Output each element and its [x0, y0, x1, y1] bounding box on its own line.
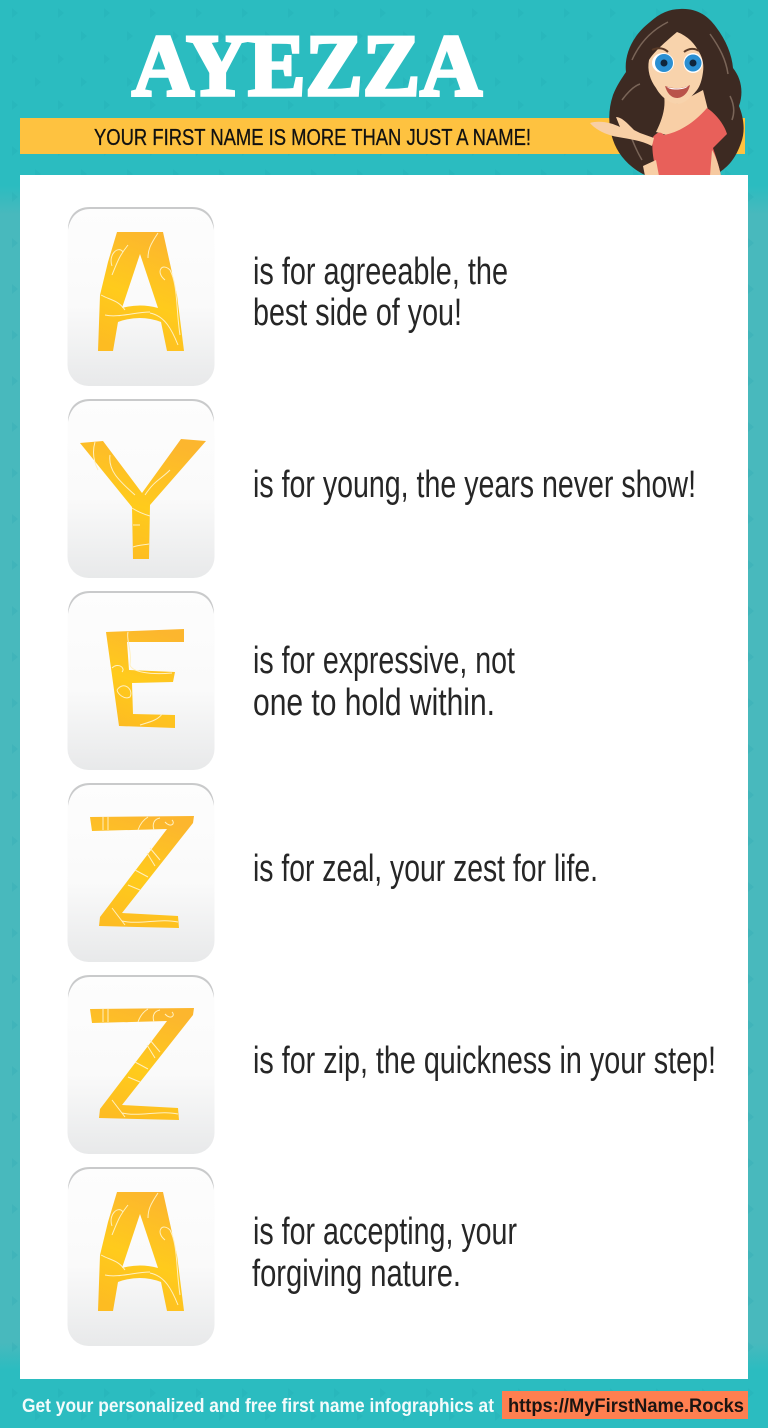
card Z second [68, 976, 214, 1154]
card A second [68, 1168, 214, 1346]
row 1 text: best side of you! [253, 292, 462, 334]
row 2: letter Y [68, 399, 214, 578]
row 3: letter E [68, 591, 214, 770]
row 3 text [253, 640, 515, 724]
face [648, 32, 703, 104]
letter Z second [90, 1008, 194, 1120]
eye left [652, 53, 674, 73]
mouth [665, 85, 690, 98]
subtitle banner [20, 118, 745, 154]
row 1 text [253, 251, 508, 334]
card Y [68, 400, 214, 578]
row 4 text: is for zeal, your zest for life. [253, 848, 598, 890]
row 3 text: one to hold within. [253, 682, 495, 724]
illustration: cartoon woman [590, 9, 744, 176]
row 6 text [252, 1211, 517, 1295]
letter E [106, 629, 184, 728]
footer url badge [502, 1391, 748, 1419]
url text: https://MyFirstName.Rocks [508, 1396, 744, 1417]
neck [656, 90, 708, 136]
letter A [98, 232, 184, 351]
eye right [684, 53, 702, 73]
row 5: letter Z [68, 975, 214, 1154]
row 6 text: forgiving nature. [252, 1253, 461, 1295]
row 1 text: is for agreeable, the [253, 251, 508, 293]
footer text: Get your personalized and free first name infographics at [22, 1396, 495, 1417]
card A [68, 208, 214, 386]
raised arm and hand [590, 117, 654, 146]
lower arm [643, 160, 659, 176]
row 1: letter A [68, 207, 214, 386]
shirt [652, 108, 727, 176]
row 6: letter A [68, 1167, 214, 1346]
right arm [710, 150, 721, 176]
eyebrows [652, 48, 699, 52]
card Z [68, 784, 214, 962]
title: AYEZZA [132, 18, 482, 115]
row 6 text: is for accepting, your [253, 1211, 517, 1253]
subtitle text: YOUR FIRST NAME IS MORE THAN JUST A NAME! [94, 124, 531, 150]
white content panel [20, 175, 748, 1379]
letter Y [80, 439, 206, 559]
letter Z [90, 816, 194, 928]
row 3 text: is for expressive, not [253, 640, 515, 682]
letter A second [98, 1192, 184, 1311]
row 4: letter Z [68, 783, 214, 962]
hair [609, 9, 744, 175]
card E [68, 592, 214, 770]
